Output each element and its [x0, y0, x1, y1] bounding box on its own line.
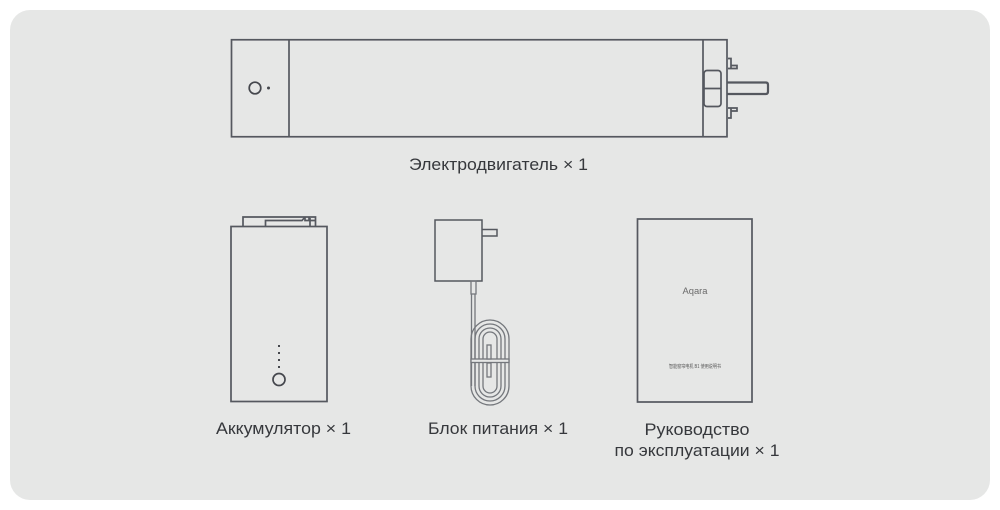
brand text: Aqara [682, 286, 708, 296]
label: manual [614, 420, 780, 460]
label: power adapter: Блок питания × 1 [428, 419, 568, 438]
label: motor: Электродвигатель × 1 [409, 155, 588, 174]
label: battery: Аккумулятор × 1 [216, 419, 351, 438]
icon: motor [232, 40, 768, 137]
label: manual: по эксплуатации × 1 [614, 441, 780, 460]
icon: power adapter [435, 220, 509, 405]
icon: battery [231, 217, 327, 402]
icon: manual [638, 219, 752, 402]
manual title: 智能窗帘电机 B1 使用说明书 [669, 363, 721, 370]
label: manual: Руководство [644, 420, 750, 439]
